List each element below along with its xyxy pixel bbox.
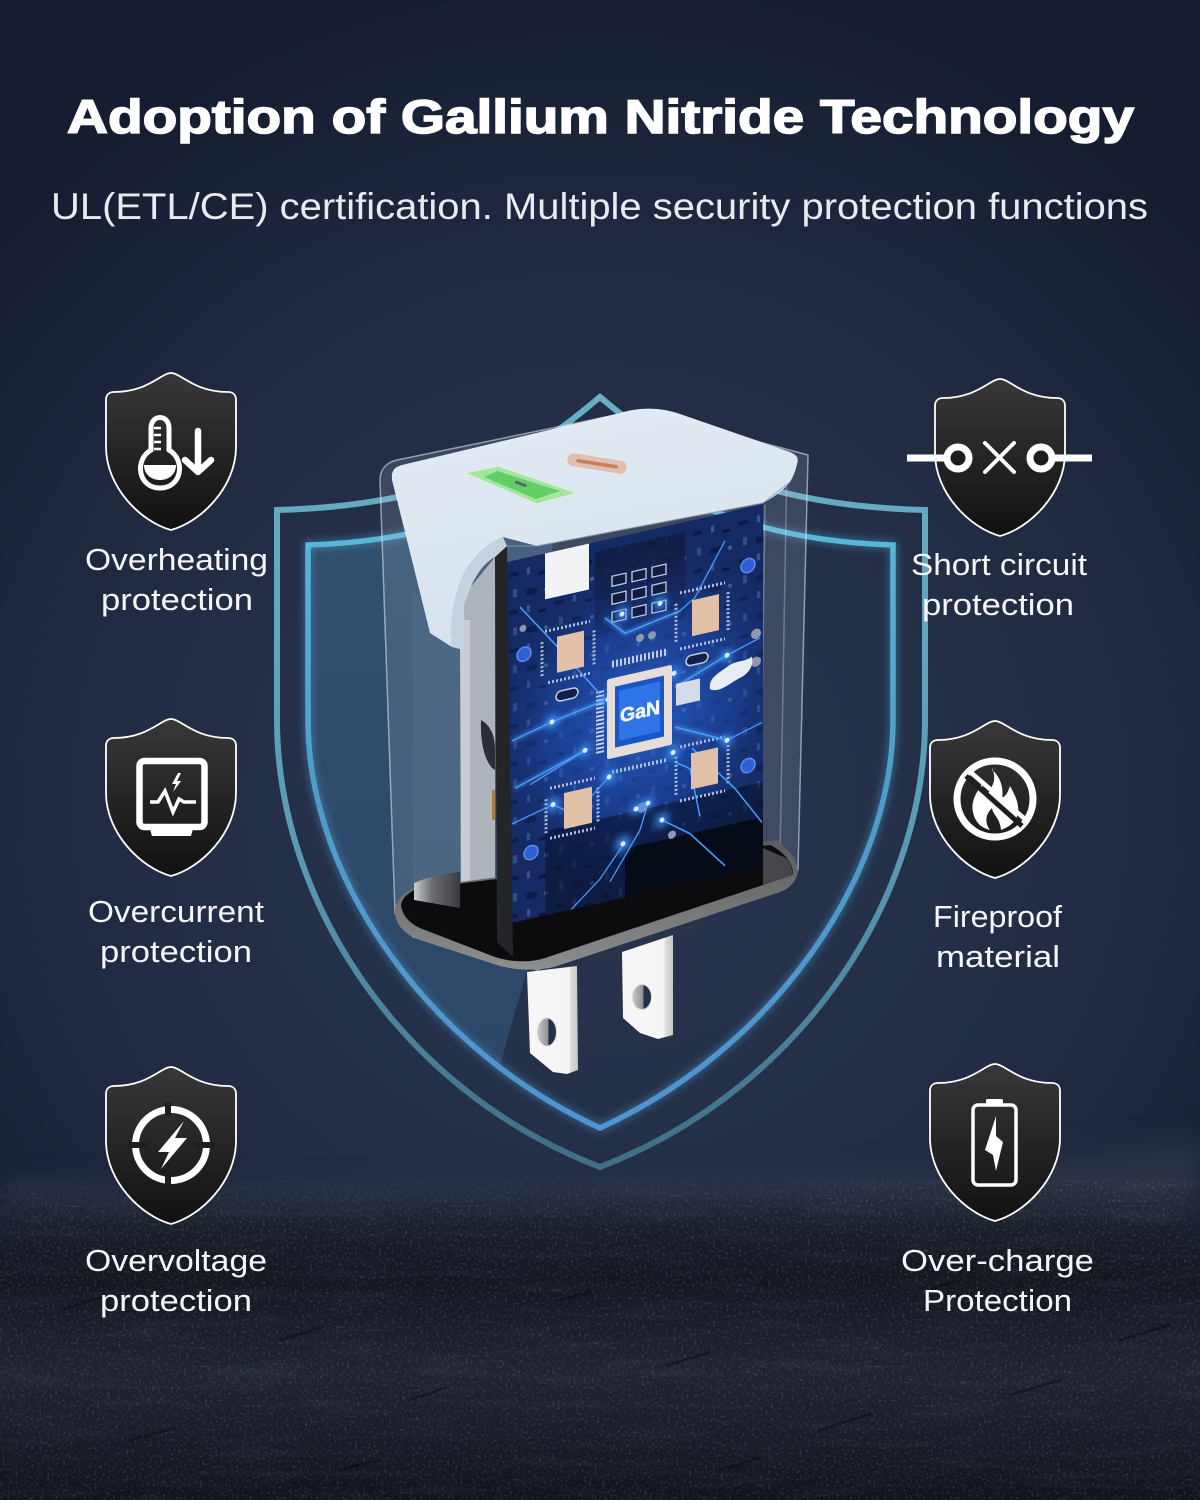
feature: over-charge protection <box>901 1064 1094 1318</box>
label: Short circuit <box>911 547 1087 582</box>
label: protection <box>101 582 253 617</box>
white parts <box>710 657 752 692</box>
GaN chip: GaN <box>620 697 660 727</box>
USB-C port <box>566 452 628 475</box>
copper pads <box>557 594 719 831</box>
GaN chip <box>607 665 672 759</box>
feature: overcurrent protection <box>88 719 264 969</box>
glowing nodes <box>545 580 733 869</box>
label: Overheating <box>85 542 268 577</box>
subtitle: UL(ETL/CE) certification. Multiple security protection functions <box>51 186 1148 227</box>
feature: fireproof material <box>930 721 1062 974</box>
label <box>933 899 1062 974</box>
feature: overheating protection <box>85 373 268 617</box>
feature: short circuit protection <box>907 379 1092 622</box>
prong right <box>622 935 673 1039</box>
inner spine <box>495 546 513 957</box>
USB-A port <box>465 466 577 504</box>
housing side facets <box>412 590 460 886</box>
IC pin rows <box>542 582 728 840</box>
label: Fireproof <box>933 899 1062 934</box>
transparent housing <box>380 410 808 970</box>
icon: no flame shield <box>930 721 1060 878</box>
label <box>901 1243 1094 1318</box>
icon: battery shield <box>930 1064 1060 1221</box>
round grey parts <box>520 624 761 839</box>
label: protection <box>100 934 252 969</box>
icon: monitor shield <box>106 719 236 876</box>
base <box>395 840 798 970</box>
large protective shield graphic <box>277 397 925 1167</box>
label: Protection <box>923 1283 1072 1318</box>
circuit board <box>507 504 765 935</box>
label: material <box>936 939 1060 974</box>
ground <box>0 1145 1200 1500</box>
round blue parts <box>517 557 755 863</box>
top cap <box>392 409 798 647</box>
crystal ovals <box>556 652 708 702</box>
title: Adoption of Gallium Nitride Technology <box>67 90 1134 143</box>
cap edge highlight <box>507 482 790 546</box>
prong left <box>527 966 578 1074</box>
label <box>85 542 268 617</box>
label: Overvoltage <box>85 1243 267 1278</box>
label <box>911 547 1087 622</box>
label <box>88 894 264 969</box>
icon: open circuit shield <box>907 379 1092 536</box>
cap inner flap <box>451 537 507 650</box>
SMD capacitor rows <box>612 564 666 622</box>
label: protection <box>100 1283 252 1318</box>
label <box>85 1243 267 1318</box>
icon: thermometer shield <box>106 373 236 530</box>
label: Overcurrent <box>88 894 264 929</box>
feature: overvoltage protection <box>85 1067 267 1318</box>
label: protection <box>922 587 1074 622</box>
internal side plate <box>460 557 495 923</box>
circuit traces <box>512 532 762 924</box>
label: Over-charge <box>901 1243 1094 1278</box>
icon: bolt ring shield <box>106 1067 236 1224</box>
charger <box>380 409 808 1074</box>
